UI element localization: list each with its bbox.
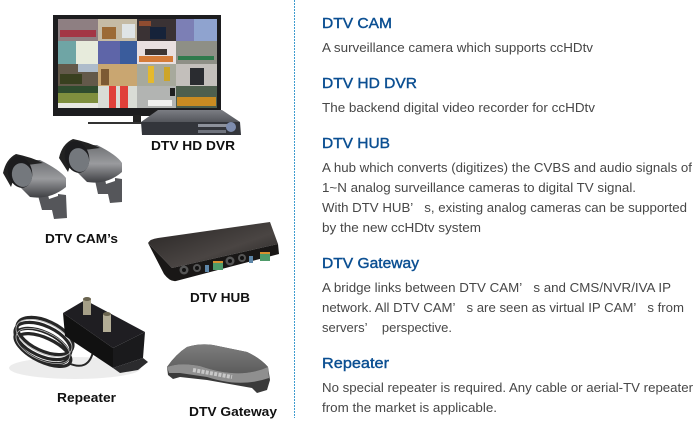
section: DTV HD DVR: DTV HD DVR bbox=[322, 75, 417, 92]
divider bbox=[294, 0, 296, 418]
label: DTV Gateway: DTV Gateway bbox=[189, 404, 278, 419]
image: monitor with camera mosaic bbox=[53, 15, 221, 124]
image: camera 1 bbox=[3, 153, 67, 219]
section: DTV HUB: A hub which converts (digitizes) the CVBS and audio signals of bbox=[322, 160, 692, 175]
label: DTV CAM's: DTV CAM’s bbox=[45, 231, 118, 246]
section: DTV HD DVR bbox=[322, 75, 596, 115]
label: DTV HUB: DTV HUB bbox=[190, 290, 250, 305]
section: Repeater bbox=[322, 355, 694, 415]
label: DTV HD DVR: DTV HD DVR bbox=[151, 138, 236, 153]
section: DTV Gateway bbox=[322, 255, 684, 335]
section: DTV HUB: DTV HUB bbox=[322, 135, 390, 152]
section: Repeater: Repeater bbox=[322, 355, 389, 372]
section: DTV HUB: 1~N analog surveillance cameras to digital TV signal. bbox=[322, 180, 636, 195]
section: DTV Gateway: A bridge links between DTV CAM’ s and CMS/NVR/IVA IP bbox=[322, 280, 671, 295]
image: repeater bbox=[9, 297, 148, 379]
section: Repeater: from the market is applicable. bbox=[322, 400, 497, 415]
section: DTV HUB: by the new ccHDtv system bbox=[322, 220, 481, 235]
section: DTV HUB bbox=[322, 135, 692, 235]
section: DTV CAM: DTV CAM bbox=[322, 15, 392, 32]
section: DTV Gateway: network. All DTV CAM’ s are seen as virtual IP CAM’ s from bbox=[322, 300, 684, 315]
image: DTV Gateway bbox=[167, 344, 270, 393]
label: Repeater: Repeater bbox=[57, 390, 116, 405]
section: DTV CAM: A surveillance camera which supports ccHDtv bbox=[322, 40, 594, 55]
section: DTV HUB: With DTV HUB’ s, existing analog cameras can be supported bbox=[322, 200, 687, 215]
section: DTV Gateway: servers’ perspective. bbox=[322, 320, 452, 335]
section: DTV Gateway: DTV Gateway bbox=[322, 255, 420, 272]
section: DTV CAM bbox=[322, 15, 594, 55]
image: camera 2 bbox=[59, 138, 122, 203]
image: DTV HUB bbox=[148, 222, 279, 281]
section: DTV HD DVR: The backend digital video recorder for ccHDtv bbox=[322, 100, 596, 115]
image: DVR box bbox=[141, 110, 241, 135]
section: Repeater: No special repeater is required. Any cable or aerial-TV repeater bbox=[322, 380, 694, 395]
